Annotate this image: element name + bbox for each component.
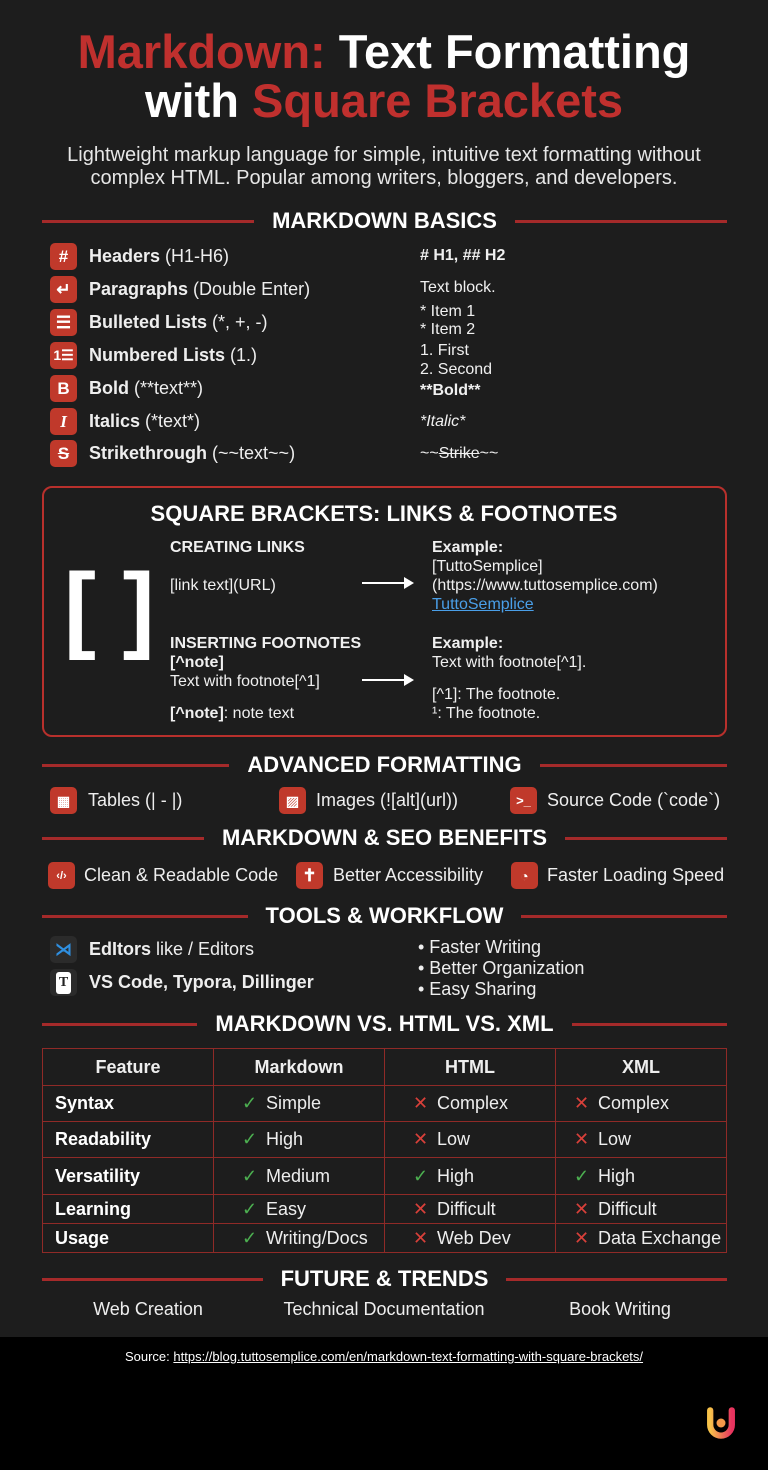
heading: advanced formatting: ADVANCED FORMATTING bbox=[247, 752, 522, 777]
panel: basics examples: 1. First bbox=[420, 342, 469, 359]
table: comparison: Medium bbox=[266, 1166, 330, 1186]
heading: square brackets: SQUARE BRACKETS: LINKS & FOOTNOTES bbox=[151, 501, 617, 526]
heading: comparison: MARKDOWN VS. HTML VS. XML bbox=[215, 1011, 554, 1036]
list: tool benefits: • Better Organization bbox=[418, 958, 584, 978]
text: link example bbox=[432, 539, 658, 613]
table: comparison: ✓ bbox=[242, 1166, 257, 1186]
panel: advanced items: ▨ bbox=[286, 792, 299, 808]
panel: tools: VS Code, Typora, Dillinger bbox=[89, 972, 314, 992]
panel: future items: Technical Documentation bbox=[283, 1299, 485, 1319]
list: tool benefits bbox=[418, 937, 584, 999]
panel: basics examples: 2. Second bbox=[420, 361, 492, 378]
subtitle: Lightweight markup language for simple, intuitive text formatting without bbox=[67, 144, 701, 166]
panel: basics list: Numbered Lists (1.) bbox=[89, 345, 257, 365]
panel: basics list: I bbox=[60, 412, 67, 430]
panel: basics examples: **Bold** bbox=[420, 382, 480, 399]
panel: basics examples: *Italic* bbox=[420, 413, 465, 430]
table: comparison: ✕ bbox=[574, 1129, 589, 1149]
text: link example: TuttoSemplice bbox=[432, 596, 534, 613]
table: comparison: High bbox=[266, 1129, 303, 1149]
panel: future items bbox=[93, 1299, 671, 1319]
heading: future: FUTURE & TRENDS bbox=[281, 1266, 488, 1291]
panel: basics list: B bbox=[57, 378, 70, 398]
panel: basics list bbox=[50, 243, 310, 467]
table: comparison: Usage bbox=[55, 1228, 109, 1248]
table: comparison: Feature bbox=[95, 1056, 161, 1076]
text: footnote example: Text with footnote[^1]. bbox=[432, 654, 586, 671]
panel: seo items bbox=[48, 862, 724, 889]
list: tool benefits: • Faster Writing bbox=[418, 937, 541, 957]
panel: square brackets: [^note]: note text bbox=[170, 705, 294, 722]
table: comparison: Difficult bbox=[598, 1198, 657, 1218]
table: comparison: ✕ bbox=[413, 1093, 428, 1113]
panel: advanced items: Tables (| - |) bbox=[88, 790, 182, 810]
panel: seo items: Faster Loading Speed bbox=[547, 865, 724, 885]
panel: basics examples: ~~Strike~~ bbox=[420, 445, 498, 462]
panel: basics list: S bbox=[58, 444, 69, 462]
panel: basics list: # bbox=[59, 246, 68, 266]
table: comparison: High bbox=[598, 1166, 635, 1186]
panel: basics examples: * Item 2 bbox=[420, 321, 475, 338]
table: comparison: Low bbox=[598, 1129, 631, 1149]
table: comparison: Writing/Docs bbox=[266, 1228, 368, 1248]
panel: basics examples: * Item 1 bbox=[420, 303, 475, 320]
heading: tools: TOOLS & WORKFLOW bbox=[266, 903, 503, 928]
table: comparison: Data Exchange bbox=[598, 1228, 721, 1248]
panel: basics list: Bold (**text**) bbox=[89, 378, 203, 398]
table: comparison: ✓ bbox=[242, 1129, 257, 1149]
table: comparison: Difficult bbox=[437, 1198, 496, 1218]
text: link example: Example: bbox=[432, 539, 503, 556]
table: comparison: ✓ bbox=[242, 1198, 257, 1218]
title: with Square Brackets bbox=[145, 74, 623, 127]
panel: basics examples bbox=[420, 247, 505, 462]
text: inserting footnotes bbox=[170, 635, 361, 690]
subtitle bbox=[67, 144, 701, 189]
heading: seo benefits: MARKDOWN & SEO BENEFITS bbox=[222, 825, 547, 850]
arrow: links bbox=[362, 582, 412, 584]
panel: square brackets: [link text](URL) bbox=[170, 577, 276, 594]
text: inserting footnotes: INSERTING FOOTNOTES bbox=[170, 635, 361, 652]
panel: seo items: Clean & Readable Code bbox=[84, 865, 278, 885]
panel: tools bbox=[50, 936, 314, 996]
table: comparison: Complex bbox=[598, 1093, 669, 1113]
table: comparison: ✕ bbox=[574, 1198, 589, 1218]
panel: basics list: Italics (*text*) bbox=[89, 411, 200, 431]
panel: seo items: ✝ bbox=[302, 866, 317, 884]
heading: markdown basics: MARKDOWN BASICS bbox=[272, 208, 497, 233]
panel: basics list: Paragraphs (Double Enter) bbox=[89, 279, 310, 299]
panel: basics list: Strikethrough (~~text~~) bbox=[89, 443, 295, 463]
panel: advanced items: >_ bbox=[516, 792, 531, 808]
subtitle: complex HTML. Popular among writers, bloggers, and developers. bbox=[91, 167, 677, 189]
table: comparison: Syntax bbox=[55, 1093, 114, 1113]
panel: square brackets: [^1]: The footnote. bbox=[432, 686, 560, 703]
table: comparison: Learning bbox=[55, 1198, 131, 1218]
table: comparison: ✕ bbox=[413, 1228, 428, 1248]
panel: square brackets: ¹: The footnote. bbox=[432, 705, 540, 722]
panel: advanced items: Images (![alt](url)) bbox=[316, 790, 458, 810]
source text: Source: https://blog.tuttosemplice.com/en/markdown-text-formatting-with-square-brackets/ bbox=[125, 1349, 643, 1364]
table: comparison: Low bbox=[437, 1129, 470, 1149]
title bbox=[78, 25, 690, 127]
panel: tools: EdItors like / Editors bbox=[89, 939, 254, 959]
panel: basics examples: # H1, ## H2 bbox=[420, 247, 505, 264]
icon: logo bbox=[707, 1407, 735, 1439]
panel: tools: T bbox=[59, 974, 68, 990]
table: comparison: ✓ bbox=[574, 1166, 589, 1186]
footer bbox=[0, 1337, 768, 1470]
panel: basics list: Headers (H1-H6) bbox=[89, 246, 229, 266]
table: comparison: Easy bbox=[266, 1198, 306, 1218]
table: comparison bbox=[42, 1048, 727, 1253]
table: comparison: Web Dev bbox=[437, 1228, 511, 1248]
table: comparison: ✕ bbox=[574, 1228, 589, 1248]
panel: basics list: Bulleted Lists (*, +, -) bbox=[89, 312, 268, 332]
table: comparison: ✕ bbox=[413, 1198, 428, 1218]
title: Markdown: Text Formatting bbox=[78, 25, 690, 78]
text: footnote example: Example: bbox=[432, 635, 503, 652]
text: creating links: CREATING LINKS bbox=[170, 539, 305, 556]
table: comparison: Readability bbox=[55, 1129, 151, 1149]
table: comparison: ✓ bbox=[242, 1093, 257, 1113]
table: comparison: ✓ bbox=[242, 1228, 257, 1248]
table: comparison: Versatility bbox=[55, 1166, 140, 1186]
arrow: footnotes bbox=[362, 679, 412, 681]
icon: brackets: [ ] bbox=[64, 554, 155, 661]
text: footnote example bbox=[432, 635, 586, 671]
panel: seo items: Better Accessibility bbox=[333, 865, 483, 885]
table: comparison: ✕ bbox=[574, 1093, 589, 1113]
panel: square brackets bbox=[42, 486, 727, 737]
text: link example: [TuttoSemplice] bbox=[432, 558, 543, 575]
text: link example: (https://www.tuttosemplice.com) bbox=[432, 577, 658, 594]
text: inserting footnotes: [^note] bbox=[170, 654, 224, 671]
panel: advanced items bbox=[50, 787, 720, 814]
table: comparison: High bbox=[437, 1166, 474, 1186]
table: comparison: XML bbox=[622, 1056, 660, 1076]
list: tool benefits: • Easy Sharing bbox=[418, 979, 536, 999]
table: comparison: Complex bbox=[437, 1093, 508, 1113]
panel: advanced items: ▦ bbox=[57, 792, 70, 808]
panel: seo items: ◔ bbox=[520, 868, 529, 884]
panel: basics list: ↵ bbox=[56, 280, 71, 298]
text: inserting footnotes: Text with footnote[^1] bbox=[170, 673, 320, 690]
table: comparison: ✕ bbox=[413, 1129, 428, 1149]
panel: seo items: ‹/› bbox=[56, 870, 67, 882]
panel: basics examples: Text block. bbox=[420, 279, 496, 296]
panel: basics list: 1☰ bbox=[53, 347, 74, 363]
table: comparison: ✓ bbox=[413, 1166, 428, 1186]
table: comparison: Markdown bbox=[254, 1056, 344, 1076]
panel: future items: Book Writing bbox=[569, 1299, 671, 1319]
panel: tools: ⋊ bbox=[55, 940, 72, 958]
panel: future items: Web Creation bbox=[93, 1299, 203, 1319]
table: comparison: Simple bbox=[266, 1093, 321, 1113]
panel: advanced items: Source Code (`code`) bbox=[547, 790, 720, 810]
table: comparison: HTML bbox=[445, 1056, 495, 1076]
panel: basics list: ☰ bbox=[56, 312, 71, 332]
